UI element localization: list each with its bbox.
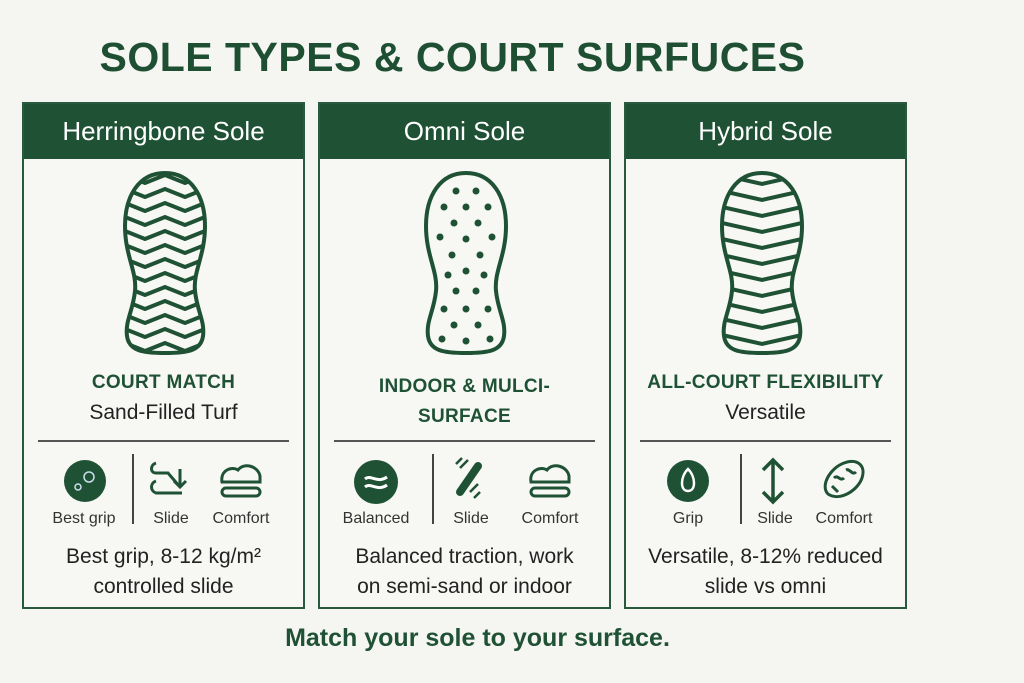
- panel: omni: Comfort: [522, 510, 578, 527]
- icon: slide arrow: [762, 458, 784, 504]
- header: Hybrid Sole: [698, 116, 833, 146]
- icon: hybrid sole: [720, 171, 804, 355]
- subtitle: SURFACE: [418, 406, 511, 427]
- description: Balanced traction, work: [355, 545, 574, 568]
- icon: slide: [150, 462, 187, 494]
- subtitle: INDOOR & MULCI-: [379, 376, 550, 397]
- header: [24, 104, 303, 159]
- title: SOLE TYPES & COURT SURFUCES: [99, 34, 806, 80]
- panel: hybrid: Grip: [673, 510, 703, 527]
- description: [648, 545, 883, 598]
- subtitle: COURT MATCH: [92, 372, 235, 393]
- footer tagline: Match your sole to your surface.: [285, 624, 670, 652]
- icon: comfort: [220, 464, 262, 498]
- panel: herringbone: [22, 102, 305, 609]
- panel: herringbone: Best grip: [52, 510, 116, 527]
- surface: Versatile: [725, 401, 806, 424]
- header: [626, 104, 905, 159]
- panel: herringbone: Slide: [153, 510, 189, 527]
- subtitle: [379, 376, 550, 427]
- header: Omni Sole: [404, 116, 525, 146]
- panel: herringbone: Comfort: [213, 510, 269, 527]
- description: [66, 545, 261, 598]
- panel: hybrid: [624, 102, 907, 609]
- panel: hybrid: Comfort: [816, 510, 872, 527]
- surface: Sand-Filled Turf: [89, 401, 238, 424]
- subtitle: ALL-COURT FLEXIBILITY: [647, 372, 884, 393]
- icon: comfort: [529, 464, 570, 498]
- description: [355, 545, 574, 598]
- icon: grip: [667, 460, 709, 502]
- icon: omni sole: [424, 171, 508, 355]
- icon: comfort: [824, 460, 864, 498]
- header: Herringbone Sole: [62, 116, 265, 146]
- description: Best grip, 8-12 kg/m²: [66, 545, 261, 568]
- description: controlled slide: [93, 575, 234, 598]
- panel: omni: Balanced: [343, 510, 409, 527]
- description: on semi-sand or indoor: [357, 575, 572, 598]
- icon: grip: [64, 460, 106, 502]
- panel: omni: [318, 102, 611, 609]
- icon: slide: [455, 457, 482, 499]
- header: [320, 104, 609, 159]
- description: Versatile, 8-12% reduced: [648, 545, 883, 568]
- description: slide vs omni: [705, 575, 826, 598]
- icon: balanced: [354, 460, 398, 504]
- icon: herringbone sole: [123, 171, 207, 355]
- panel: omni: Slide: [453, 510, 489, 527]
- panel: hybrid: Slide: [757, 510, 793, 527]
